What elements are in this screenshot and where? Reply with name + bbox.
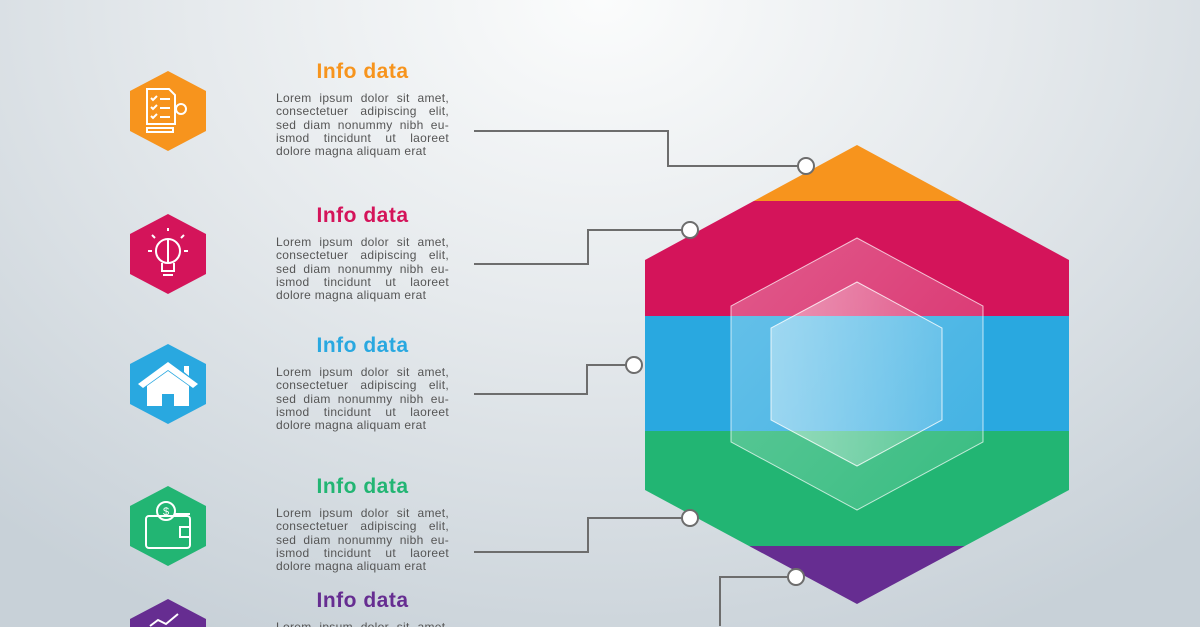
- text 1: consectetuer adipiscing elit,: [276, 104, 449, 118]
- big hexagon: [640, 140, 1080, 608]
- text 4: [276, 506, 449, 573]
- icon 3: house: [130, 344, 206, 424]
- title 1: Info data: [316, 60, 408, 83]
- title 3: Info data: [316, 334, 408, 357]
- text 3: dolore magna aliquam erat: [276, 418, 426, 432]
- title 4: Info data: [316, 475, 408, 498]
- icon 1: checklist: [130, 71, 206, 151]
- glass hexagon inner: [771, 282, 942, 466]
- text 4: dolore magna aliquam erat: [276, 559, 426, 573]
- icon 4: wallet: [130, 486, 206, 566]
- text 3: ismod tincidunt ut laoreet: [276, 405, 449, 419]
- icon 4: wallet: $: [163, 506, 169, 518]
- text 3: [276, 365, 449, 432]
- icon 5: chart: [130, 599, 206, 627]
- text 4: ismod tincidunt ut laoreet: [276, 546, 449, 560]
- text 1: [276, 91, 449, 158]
- text 2: consectetuer adipiscing elit,: [276, 248, 449, 262]
- text 3: sed diam nonummy nibh eu-: [276, 392, 449, 406]
- text 1: dolore magna aliquam erat: [276, 144, 426, 158]
- text 4: Lorem ipsum dolor sit amet,: [276, 506, 449, 520]
- text 1: ismod tincidunt ut laoreet: [276, 131, 449, 145]
- text 2: [276, 235, 449, 302]
- title 2: Info data: [316, 204, 408, 227]
- text 2: Lorem ipsum dolor sit amet,: [276, 235, 449, 249]
- glass hexagon outer: [731, 238, 983, 510]
- text 2: sed diam nonummy nibh eu-: [276, 262, 449, 276]
- text 2: dolore magna aliquam erat: [276, 288, 426, 302]
- title 5: Info data: [316, 589, 408, 612]
- text 3: consectetuer adipiscing elit,: [276, 378, 449, 392]
- text 3: Lorem ipsum dolor sit amet,: [276, 365, 449, 379]
- text 4: sed diam nonummy nibh eu-: [276, 533, 449, 547]
- graphics: [130, 71, 1069, 627]
- connectors: [474, 131, 798, 626]
- text 1: Lorem ipsum dolor sit amet,: [276, 91, 449, 105]
- text 4: consectetuer adipiscing elit,: [276, 519, 449, 533]
- connector dots: [626, 158, 814, 585]
- text 1: sed diam nonummy nibh eu-: [276, 118, 449, 132]
- icon 2: brain bulb: [130, 214, 206, 294]
- text 2: ismod tincidunt ut laoreet: [276, 275, 449, 289]
